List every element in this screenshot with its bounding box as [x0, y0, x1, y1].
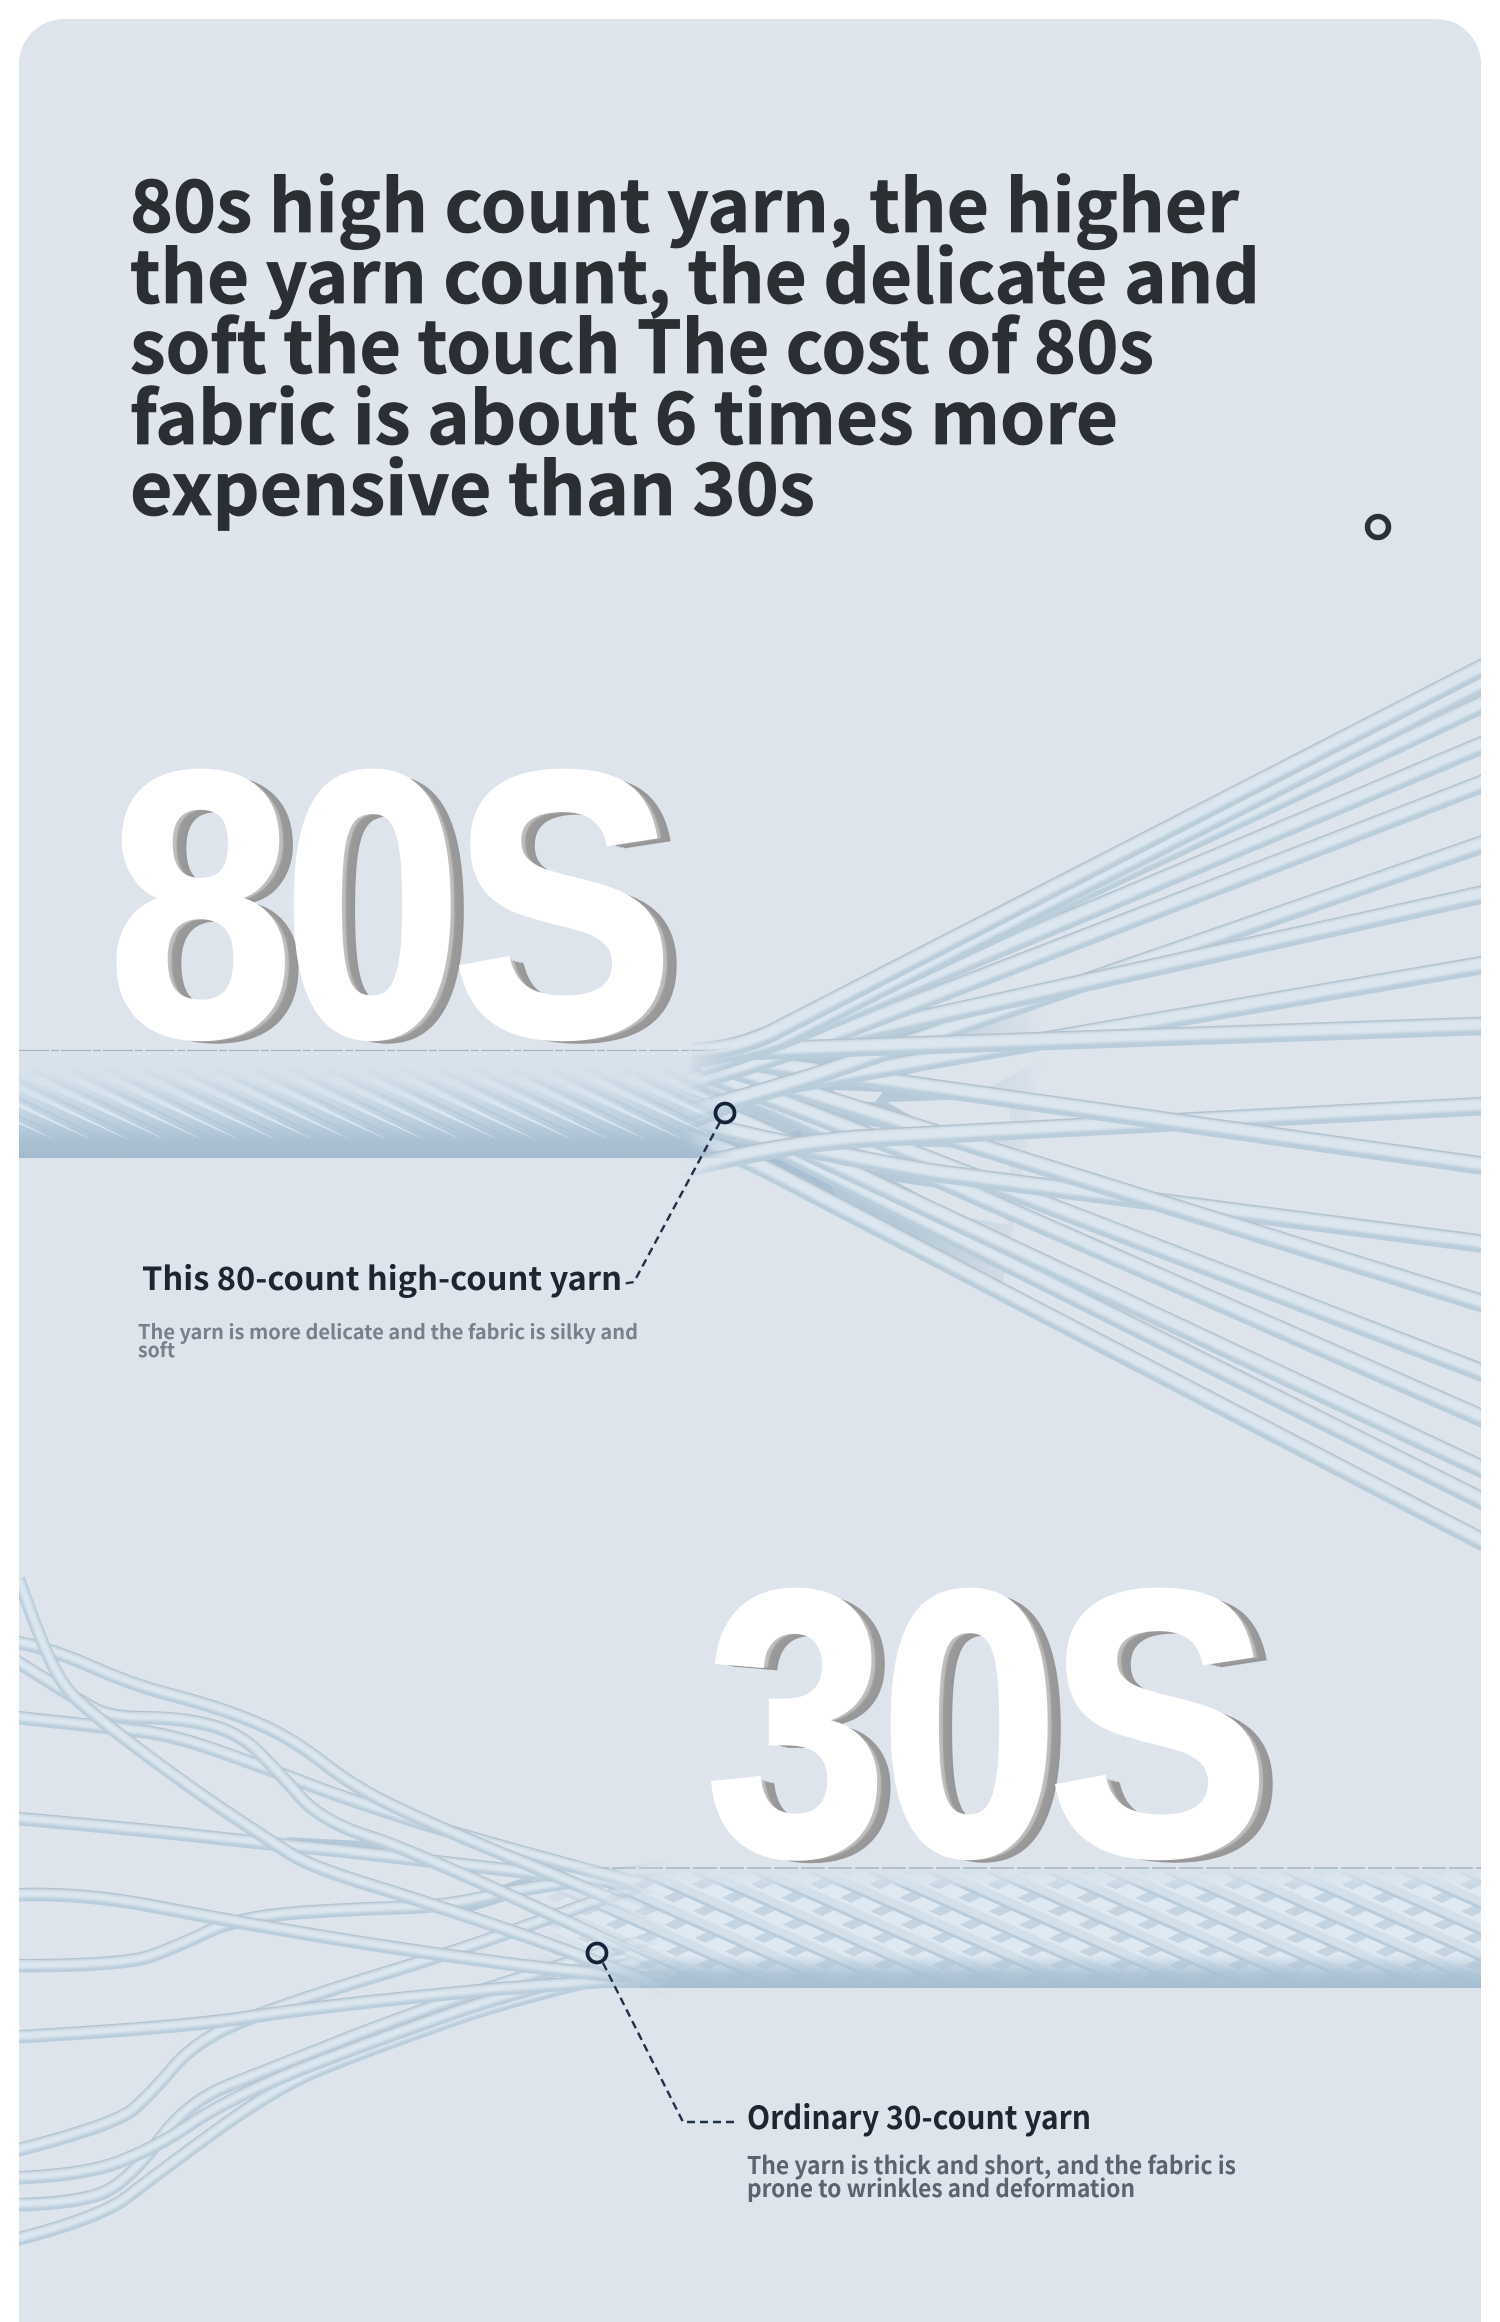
text: 0: [283, 694, 462, 1116]
80-count yarn: twisted band and fanned strands: [19, 662, 1490, 1546]
callout leader: 30-count: [588, 1944, 737, 2122]
numeral: 80S: [108, 694, 677, 1116]
callout text: 30-count: Ordinary 30-count yarn: [747, 2093, 1091, 2139]
callout text: 30-count: [747, 2093, 1236, 2204]
title: the yarn count, the delicate and: [130, 219, 1260, 324]
text: 3: [706, 1513, 887, 1935]
text: 8: [108, 694, 293, 1116]
callout text: 30-count: prone to wrinkles and deformation: [747, 2169, 1135, 2204]
title: [130, 148, 1260, 536]
callout text: 80-count: This 80-count high-count yarn: [142, 1254, 622, 1300]
icon: small ring marker: [1368, 516, 1388, 538]
callout text: 30-count: The yarn is thick and short, and the fabric is: [747, 2146, 1236, 2181]
text: S: [1048, 1513, 1270, 1935]
callout text: 80-count: [138, 1254, 638, 1363]
callout leader: 80-count: [622, 1104, 734, 1284]
title backing and text: [118, 148, 1325, 546]
numeral: 30S: [706, 1513, 1273, 1935]
callout text: 80-count: The yarn is more delicate and the fabric is silky and: [138, 1316, 638, 1345]
title: soft the touch The cost of 80s: [130, 289, 1154, 394]
callout text: 80-count: soft: [138, 1334, 176, 1363]
text: 0: [880, 1513, 1059, 1935]
title: 80s high count yarn, the higher: [130, 148, 1240, 253]
title: fabric is about 6 times more: [130, 360, 1118, 465]
title: expensive than 30s: [130, 431, 815, 536]
30-count yarn: braided band and loose strands: [10, 1579, 1490, 2242]
text: S: [452, 694, 674, 1116]
